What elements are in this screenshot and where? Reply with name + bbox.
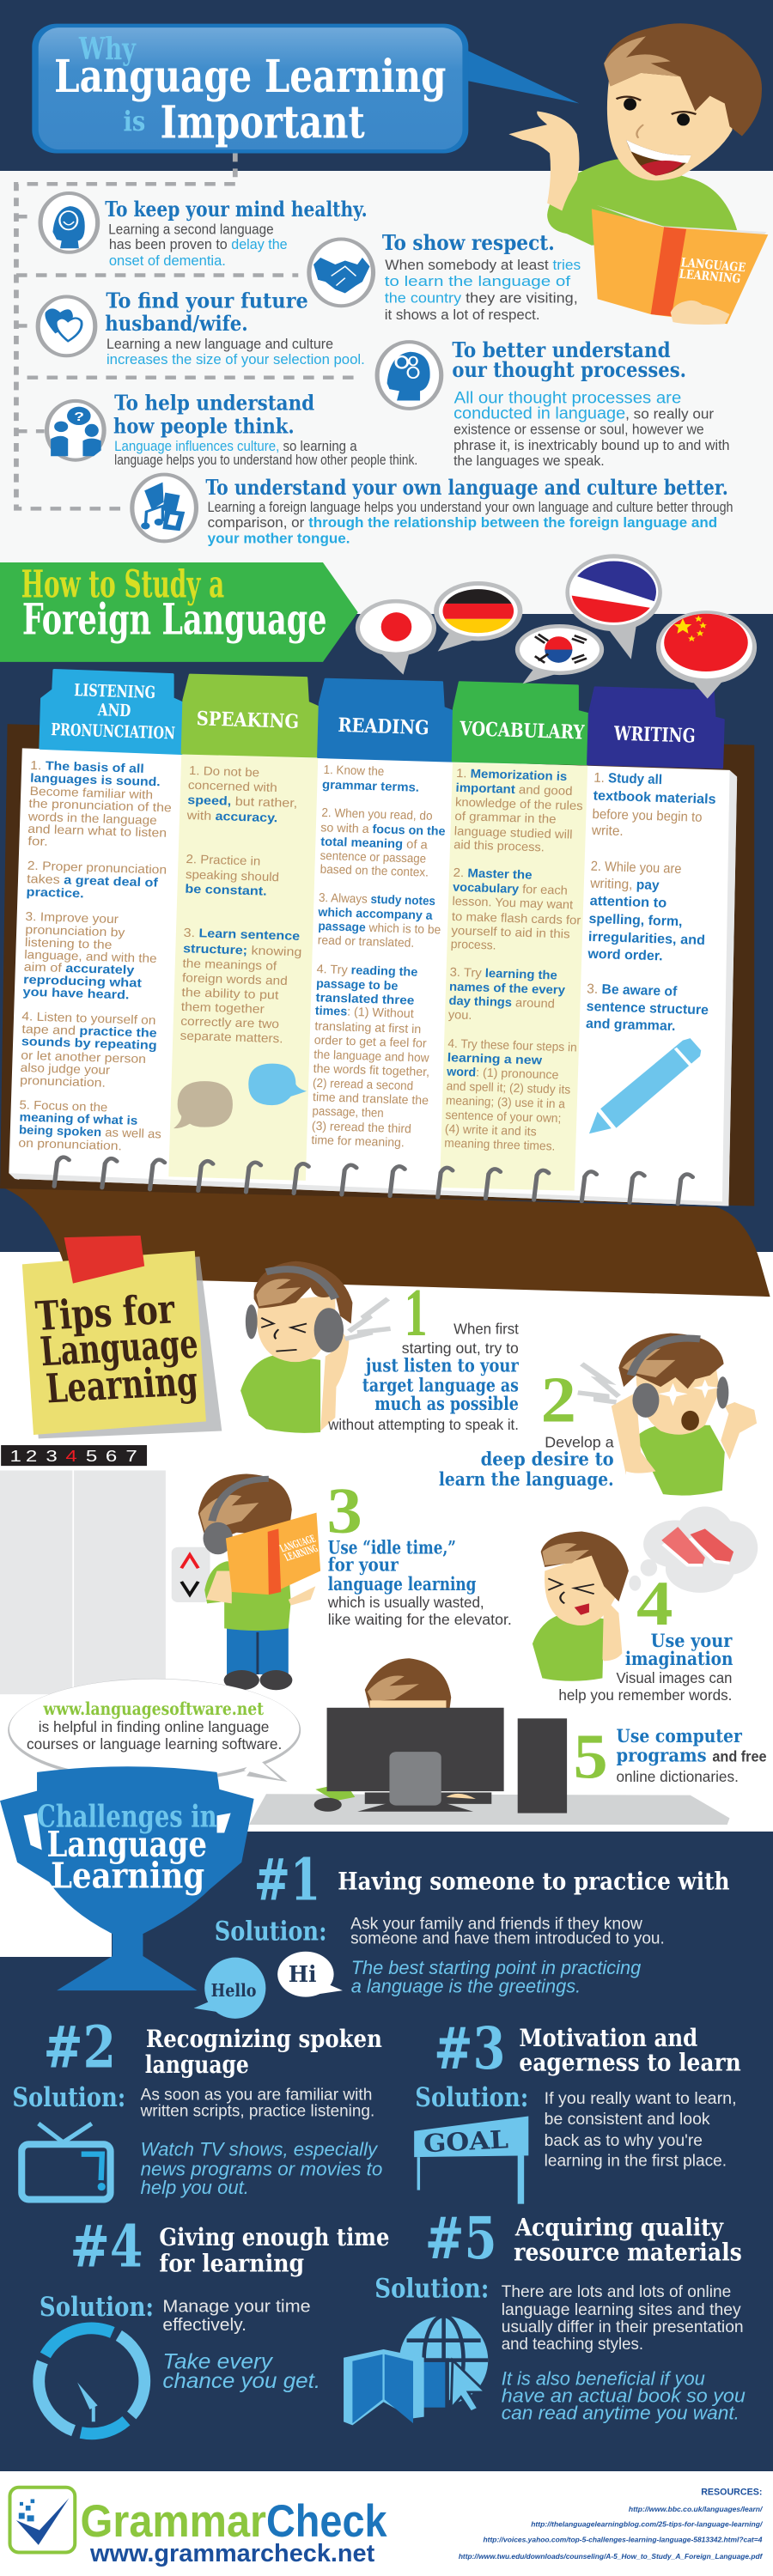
column: listening and pronunciation: pronunciation by <box>25 923 125 940</box>
challenge 5: It is also beneficial if you <box>502 2367 705 2389</box>
challenge 1: a language is the greetings. <box>351 1975 581 1996</box>
challenge 3: Solution: <box>415 2082 528 2113</box>
elevator: 6 <box>106 1446 117 1465</box>
icon: speech bubbles <box>173 1064 307 1128</box>
icon: head with gears <box>377 342 441 409</box>
item: show respect: To show respect. <box>382 230 555 255</box>
column: listening and pronunciation: pronunciation. <box>20 1073 106 1091</box>
icon: goal sign <box>414 2116 528 2204</box>
item: thought processes <box>377 337 730 469</box>
challenge 3: be consistent and look <box>545 2111 710 2129</box>
green banner: How to Study a <box>21 562 224 607</box>
challenge 5 <box>344 2203 746 2425</box>
item: how people think: Language influences culture, so learning a <box>114 438 357 454</box>
column: reading: based on the contex. <box>320 863 429 879</box>
icon: people thinking: ? <box>74 409 84 424</box>
challenge 1: #1 <box>254 1845 320 1914</box>
icon: france flag bubble <box>565 554 666 659</box>
challenge 4: effectively. <box>162 2315 247 2335</box>
challenge 4: Manage your time <box>162 2296 311 2316</box>
resources list: http://thelanguagelearningblog.com/25-tips-for-language-learning/ <box>531 2520 764 2529</box>
tip 1: 1 <box>405 1274 428 1350</box>
item: own language and culture: your mother tongue. <box>208 531 350 547</box>
column: reading: sentence or passage <box>320 849 426 866</box>
tip 3: like waiting for the elevator. <box>328 1611 512 1628</box>
tab: speaking <box>182 675 318 757</box>
column: reading: the words fit together, <box>313 1062 429 1079</box>
section: challenges in language learning <box>0 1766 764 2567</box>
challenge 1: Solution: <box>215 1917 327 1947</box>
challenge 2: Recognizing spoken <box>146 2026 382 2053</box>
column: writing: 3. Be aware of <box>587 981 678 999</box>
column: listening and pronunciation: practice. <box>26 885 84 901</box>
column: reading: total meaning of a <box>320 835 429 852</box>
challenge 2: Solution: <box>12 2082 125 2113</box>
column: vocabulary: knowledge of the rules <box>455 795 583 813</box>
column: listening and pronunciation: tape and practice the <box>21 1023 157 1041</box>
item: thought processes: conducted in language, so really our <box>453 404 715 422</box>
elevator: 4 <box>65 1446 77 1465</box>
challenge 1: someone and have them introduced to you. <box>350 1930 665 1948</box>
item: future husband or wife: husband/wife. <box>105 312 248 336</box>
column: speaking: concerned with <box>188 779 277 795</box>
challenge 3: learning in the first place. <box>545 2152 727 2170</box>
item: keep mind healthy: onset of dementia. <box>109 252 226 269</box>
elevator: 7 <box>125 1446 137 1465</box>
challenge 4: Solution: <box>40 2292 154 2323</box>
column: speaking: structure; knowing <box>183 942 302 959</box>
column: vocabulary: 3. Try learning the <box>449 965 557 982</box>
tip 1: When first <box>453 1321 519 1338</box>
tip 4: Visual images can <box>617 1669 732 1686</box>
column: listening and pronunciation: 4. Listen to yourself on <box>21 1010 156 1028</box>
footer logo: Grammar <box>81 2496 266 2547</box>
sticky note title: Tips for <box>33 1285 177 1340</box>
icon: hello and hi bubbles <box>194 1952 343 2019</box>
column: vocabulary: vocabulary for each <box>453 880 568 898</box>
icon: television <box>21 2123 111 2199</box>
item: future husband or wife: Learning a new language and culture <box>107 336 333 353</box>
tip 2: learn the language. <box>439 1468 614 1490</box>
column: listening and pronunciation: listening to the <box>25 936 113 952</box>
column: vocabulary: and spell it; (2) study its <box>446 1079 571 1097</box>
challenge 5: language learning sites and they <box>502 2301 741 2319</box>
column: reading: (2) reread a second <box>313 1077 413 1093</box>
column: vocabulary: important and good <box>455 781 573 799</box>
column: speaking: foreign words and <box>182 971 288 988</box>
challenge 5: #5 <box>425 2203 497 2272</box>
column: vocabulary: of grammar in the <box>454 810 557 826</box>
column: reading: time for meaning. <box>311 1133 405 1150</box>
item: own language and culture <box>132 475 733 547</box>
icon: goal sign: GOAL <box>423 2124 509 2158</box>
tab: reading <box>318 679 453 762</box>
column: speaking: be constant. <box>185 882 267 898</box>
column: vocabulary: yourself to aid in this <box>451 924 570 941</box>
challenge 4: chance you get. <box>162 2369 320 2393</box>
challenge 2: As soon as you are familiar with <box>141 2087 372 2105</box>
tip 2 <box>439 1364 614 1490</box>
tip 3: Use “idle time,” <box>328 1536 456 1558</box>
tip 2: 2 <box>541 1364 576 1436</box>
tip 4 <box>558 1569 733 1704</box>
column: reading: passage which is to be <box>318 920 441 937</box>
challenge 5: and teaching styles. <box>502 2336 643 2354</box>
tip 4: Use your <box>651 1630 733 1651</box>
tab: writing: WRITING <box>613 722 696 747</box>
item: keep mind healthy <box>40 193 368 269</box>
column: reading: read or translated. <box>318 933 415 951</box>
column: speaking: speaking should <box>186 868 279 884</box>
tip 5: 5 <box>574 1722 608 1792</box>
green banner <box>0 562 358 662</box>
column: vocabulary: process. <box>451 938 496 952</box>
item: future husband or wife: To find your future <box>106 289 308 313</box>
challenge 5: Solution: <box>374 2274 489 2305</box>
trophy heading: Language <box>47 1823 207 1865</box>
column: speaking: speed, but rather, <box>187 793 298 811</box>
column: vocabulary: learning a new <box>447 1051 542 1067</box>
challenge 4: #4 <box>70 2212 143 2281</box>
challenge 5: Acquiring quality <box>514 2214 724 2241</box>
column: writing: irregularities, and <box>588 929 705 948</box>
column: listening and pronunciation: meaning of what is <box>19 1110 138 1128</box>
boy with idea <box>578 1334 757 1496</box>
column: listening and pronunciation: words in the language <box>27 810 157 828</box>
tip 3: which is usually wasted, <box>327 1594 484 1611</box>
trophy heading: Learning <box>51 1855 204 1897</box>
challenge 4: Take every <box>162 2349 273 2373</box>
column: listening and pronunciation: and learn what to listen <box>27 823 167 841</box>
challenge 3: If you really want to learn, <box>545 2090 737 2108</box>
column: listening and pronunciation: 1. The basis of all <box>30 759 144 776</box>
column: reading: (3) reread the third <box>312 1120 411 1136</box>
challenge 3: Motivation and <box>519 2025 697 2052</box>
elevator <box>0 1445 210 1694</box>
item: how people think <box>47 391 417 468</box>
column: vocabulary: to make flash cards for <box>452 910 581 927</box>
item: keep mind healthy: Learning a second language <box>108 222 274 238</box>
column: speaking: 1. Do not be <box>189 764 259 780</box>
column: speaking: correctly are two <box>180 1015 279 1031</box>
column: listening and pronunciation <box>18 759 172 1153</box>
icon: clock <box>39 2328 144 2433</box>
section: why language learning is important <box>16 23 768 547</box>
column: vocabulary: day things around <box>448 994 555 1011</box>
boy reading in elevator: LANGUAGE <box>278 1533 318 1555</box>
column: writing: before you begin to <box>592 806 703 825</box>
section: how to study a foreign language <box>0 554 770 1297</box>
tab: listening and pronunciation: LISTENING <box>74 680 155 702</box>
challenge 5: usually differ in their presentation <box>502 2318 744 2336</box>
item: show respect <box>309 230 581 323</box>
thought cloud with sushi <box>629 1506 758 1593</box>
resources list: http://www.bbc.co.uk/languages/learn/ <box>629 2505 764 2513</box>
resources list: http://voices.yahoo.com/top-5-challenges-learning-language-5813342.html?cat=4 <box>484 2535 763 2543</box>
tip 3 <box>327 1474 512 1628</box>
title speech bubble: Language Learning <box>54 51 446 103</box>
column: vocabulary: word: (1) pronounce <box>446 1065 559 1082</box>
item: how people think: how people think. <box>113 414 295 439</box>
boy imagining sushi <box>533 1506 758 1681</box>
column: reading: the language and how <box>313 1048 429 1065</box>
item: future husband or wife: increases the size of your selection pool. <box>107 351 365 368</box>
column: vocabulary: aid this process. <box>453 838 545 854</box>
challenge 1: Having someone to practice with <box>338 1868 730 1895</box>
column: writing: attention to <box>589 893 667 911</box>
trophy heading <box>0 1766 254 1990</box>
item: thought processes: the languages we speak. <box>453 453 605 469</box>
column: reading: 1. Know the <box>323 763 385 779</box>
challenge 2: #2 <box>44 2013 116 2081</box>
column: vocabulary: 1. Memorization is <box>456 767 568 784</box>
tip 1: target language as <box>362 1375 519 1396</box>
column: listening and pronunciation: languages is sound. <box>30 771 161 789</box>
challenge 5: have an actual book so you <box>502 2385 746 2406</box>
item: show respect: the country they are visiting, <box>385 290 578 307</box>
column: speaking: 2. Practice in <box>186 853 261 868</box>
boy reading in elevator: LEARNING <box>283 1543 320 1564</box>
column: speaking: separate matters. <box>180 1029 283 1046</box>
column: writing: sentence structure <box>586 999 709 1018</box>
icon: handshake <box>309 240 374 306</box>
column: reading: time and translate the <box>313 1091 429 1108</box>
item: keep mind healthy: has been proven to delay the <box>109 236 288 253</box>
column: writing: 2. While you are <box>591 859 682 877</box>
challenge 5: resource materials <box>514 2239 742 2267</box>
tab: reading: READING <box>338 714 429 739</box>
website speech bubble: www.languagesoftware.net <box>43 1698 264 1719</box>
footer logo: www.grammarcheck.net <box>89 2540 375 2567</box>
challenge 1 <box>194 1845 730 2019</box>
column: listening and pronunciation: or let another person <box>21 1048 146 1066</box>
boy with book <box>508 23 768 325</box>
column: vocabulary: you. <box>448 1008 472 1023</box>
icon: hearts <box>38 297 95 355</box>
column: vocabulary: names of the every <box>449 980 566 997</box>
challenge 2: news programs or movies to <box>141 2158 382 2179</box>
icon: korea flag bubble <box>515 624 604 683</box>
title speech bubble <box>32 24 579 154</box>
tip 2: Develop a <box>545 1434 614 1451</box>
tip 1: much as possible <box>374 1393 519 1414</box>
item: keep mind healthy: To keep your mind healthy. <box>105 197 368 222</box>
item: how people think: To help understand <box>114 391 314 416</box>
column: reading: passage, then <box>312 1104 384 1121</box>
notebook <box>0 724 754 1206</box>
item: how people think: language helps you to understand how other people think. <box>114 452 417 468</box>
column: listening and pronunciation: you have heard. <box>22 985 130 1002</box>
column: listening and pronunciation: for. <box>27 835 48 849</box>
resources list <box>459 2487 764 2561</box>
challenge 4: for learning <box>159 2250 304 2277</box>
icon: china flag bubble <box>656 611 757 699</box>
icon: hello and hi bubbles: Hello <box>211 1980 256 2001</box>
column: speaking <box>173 764 307 1128</box>
column: reading <box>311 763 446 1150</box>
icon: germany flag bubble <box>434 581 522 652</box>
column: listening and pronunciation: 2. Proper pronunciation <box>27 859 167 877</box>
tip 5 <box>574 1722 767 1792</box>
column: listening and pronunciation: takes a great deal of <box>27 872 159 890</box>
tab: vocabulary: VOCABULARY <box>459 717 586 744</box>
website speech bubble <box>8 1679 301 1782</box>
column: vocabulary: 4. Try these four steps in <box>447 1037 577 1054</box>
challenge 5: There are lots and lots of online <box>502 2283 731 2301</box>
tip 3: for your <box>328 1553 399 1576</box>
icon: hello and hi bubbles: Hi <box>289 1961 317 1988</box>
spiral binding <box>54 1157 692 1204</box>
column: vocabulary <box>444 767 583 1153</box>
column: writing <box>586 770 716 1133</box>
website speech bubble: courses or language learning software. <box>27 1735 282 1753</box>
sticky note title: Learning <box>44 1358 200 1413</box>
column: vocabulary: lesson. You may want <box>452 895 574 912</box>
challenge 3: eagerness to learn <box>519 2050 741 2077</box>
icon: japan flag bubble <box>356 599 436 675</box>
column: reading: 2. When you read, do <box>321 806 433 823</box>
item: future husband or wife <box>38 289 365 368</box>
boy listening with headphones <box>240 1261 391 1433</box>
title speech bubble: Important <box>161 96 365 149</box>
challenge 2: language <box>145 2051 249 2079</box>
tip 1: starting out, try to <box>402 1340 519 1357</box>
column: listening and pronunciation: aim of accurately <box>23 960 135 977</box>
tab: listening and pronunciation: AND <box>97 700 131 720</box>
column: speaking: with accuracy. <box>186 809 278 825</box>
column: reading: translating at first in <box>314 1019 422 1036</box>
column: reading: order to get a feel for <box>314 1034 427 1051</box>
column: writing: word order. <box>587 946 663 963</box>
tab: speaking: SPEAKING <box>196 708 300 733</box>
elevator: 5 <box>86 1446 97 1465</box>
tip 1: without attempting to speak it. <box>327 1417 519 1434</box>
column: listening and pronunciation: reproducing what <box>23 973 142 990</box>
challenge 2: help you out. <box>141 2177 249 2198</box>
column: listening and pronunciation: the pronunciation of the <box>28 797 172 815</box>
column: writing: and grammar. <box>586 1016 676 1034</box>
tab: listening and pronunciation <box>40 671 182 753</box>
tip 3: 3 <box>327 1474 362 1547</box>
tip 3: language learning <box>328 1573 476 1595</box>
resources list: RESOURCES: <box>701 2487 762 2497</box>
column: listening and pronunciation: 5. Focus on the <box>19 1098 108 1115</box>
column: reading: 4. Try reading the <box>316 963 418 979</box>
column: listening and pronunciation: Become familiar with <box>29 785 153 802</box>
column: reading: 3. Always study notes <box>319 891 435 908</box>
column: listening and pronunciation: on pronunciation. <box>18 1136 122 1153</box>
connector dashed lines <box>16 154 362 508</box>
item: thought processes: To better understand <box>452 337 671 362</box>
column: listening and pronunciation: also judge your <box>20 1061 110 1078</box>
challenge 5: can read anytime you want. <box>502 2403 740 2424</box>
section: tips for language learning <box>0 1236 767 1825</box>
column: reading: passage to be <box>316 977 399 993</box>
boy reading in elevator <box>198 1474 323 1690</box>
column: speaking: the ability to put <box>181 986 280 1002</box>
tip 4: 4 <box>636 1569 673 1638</box>
item: thought processes: All our thought processes are <box>454 388 681 407</box>
tab: vocabulary <box>453 682 587 764</box>
icon: pencil <box>589 1038 701 1133</box>
challenge 2: written scripts, practice listening. <box>140 2102 374 2120</box>
title speech bubble: Why <box>78 30 137 67</box>
tip 1: just listen to your <box>364 1354 520 1376</box>
sticky note title: Language <box>39 1320 200 1376</box>
column: vocabulary: sentence of your own; <box>445 1109 562 1126</box>
elevator: 3 <box>46 1446 58 1465</box>
icon: head with smile <box>40 193 98 252</box>
column: listening and pronunciation: 3. Improve your <box>25 910 119 927</box>
challenge 2 <box>12 2013 382 2199</box>
footer logo <box>9 2488 387 2567</box>
footer logo: Check <box>266 2496 387 2547</box>
challenge 2: Watch TV shows, especially <box>141 2138 378 2160</box>
challenge 3 <box>414 2014 741 2204</box>
item: show respect: to learn the language of <box>385 273 571 289</box>
column: reading: so with a focus on the <box>320 821 446 839</box>
challenge 1: Ask your family and friends if they know <box>350 1915 642 1933</box>
tab: writing <box>587 687 724 768</box>
column: writing: writing, pay <box>589 875 660 893</box>
icon: people thinking <box>47 401 104 460</box>
challenge 1: The best starting point in practicing <box>351 1957 641 1978</box>
boy at computer <box>249 1658 730 1825</box>
sticky note title <box>22 1236 222 1438</box>
item: show respect: When somebody at least tries <box>385 257 581 273</box>
column: speaking: them together <box>181 1000 265 1017</box>
challenge 3: #3 <box>434 2014 505 2082</box>
challenge 4 <box>39 2212 389 2433</box>
column: speaking: the meanings of <box>182 957 277 974</box>
item: show respect: it shows a lot of respect. <box>385 307 540 323</box>
column: vocabulary: 2. Master the <box>453 866 533 882</box>
column: writing: spelling, form, <box>588 911 683 929</box>
column: writing: 1. Study all <box>593 770 662 787</box>
column: writing: write. <box>591 823 624 839</box>
resources list: http://www.twu.edu/downloads/counseling/A-5_How_to_Study_A_Foreign_Language.pdf <box>459 2552 764 2561</box>
elevator: 2 <box>26 1446 37 1465</box>
column: listening and pronunciation: language, and with the <box>24 948 157 966</box>
icon: masks, note and film <box>132 475 196 541</box>
column: vocabulary: (4) write it and its <box>445 1122 537 1139</box>
challenge 3: back as to why you're <box>545 2132 703 2150</box>
elevator: 1 <box>9 1446 21 1465</box>
column: reading: grammar terms. <box>322 778 419 795</box>
trophy heading: Challenges in <box>37 1800 217 1835</box>
column: vocabulary: meaning three times. <box>444 1136 556 1153</box>
green banner: Foreign Language <box>22 594 327 645</box>
tab: listening and pronunciation: PRONUNCIATION <box>51 720 175 743</box>
column: vocabulary: meaning; (3) use it in a <box>446 1094 566 1111</box>
tip 1 <box>327 1274 520 1434</box>
challenge 4: Giving enough time <box>159 2224 389 2251</box>
icon: globe, book and cursor <box>344 2316 488 2425</box>
desk <box>0 1187 770 1297</box>
column: vocabulary: language studied will <box>454 824 573 841</box>
column: listening and pronunciation: being spoken as well as <box>19 1123 161 1141</box>
column: reading: which accompany a <box>317 906 433 923</box>
column: reading: times: (1) Without <box>315 1004 415 1021</box>
column: listening and pronunciation: sounds by repeating <box>21 1035 157 1053</box>
column: reading: translated three <box>315 991 415 1008</box>
website speech bubble: is helpful in finding online language <box>39 1718 269 1735</box>
title speech bubble: is <box>124 104 145 137</box>
column: writing: textbook materials <box>593 787 716 807</box>
tip 2: deep desire to <box>481 1449 614 1470</box>
column: speaking: 3. Learn sentence <box>183 927 300 944</box>
